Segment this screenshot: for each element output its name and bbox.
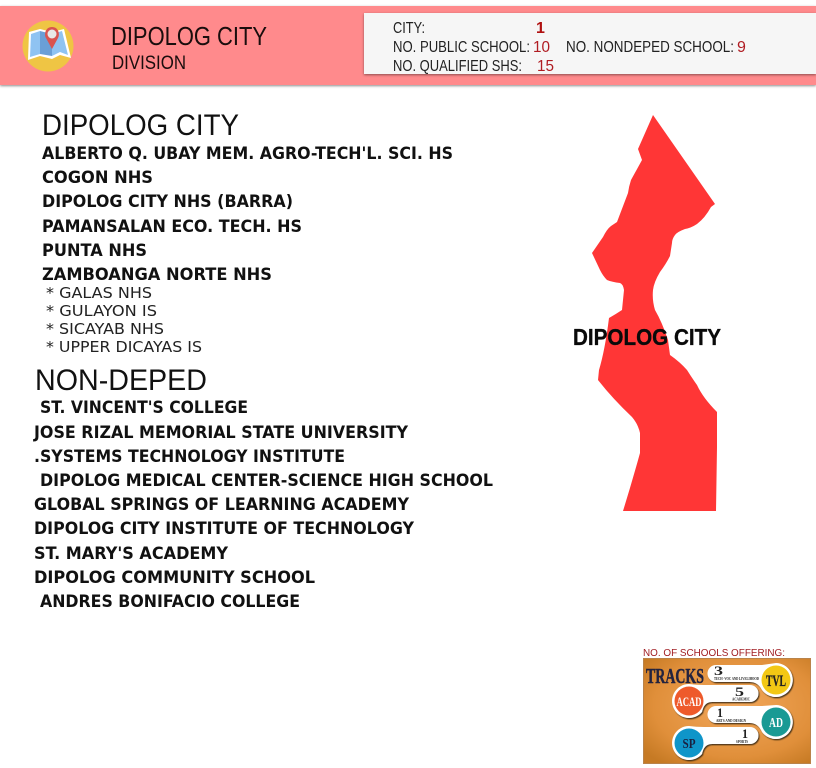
tracks caption: NO. OF SCHOOLS OFFERING: bbox=[643, 648, 785, 659]
tracks heading: TRACKS bbox=[646, 664, 704, 688]
track: SP: 1 bbox=[742, 726, 748, 741]
track: AD: ARTS AND DESIGN bbox=[716, 719, 746, 723]
track: AD: AD bbox=[769, 716, 783, 731]
stat: qualified shs: NO. QUALIFIED SHS: bbox=[393, 58, 522, 75]
non-deped school list: JOSE RIZAL MEMORIAL STATE UNIVERSITY bbox=[33, 423, 409, 442]
heading: Dipolog City: DIPOLOG CITY bbox=[42, 109, 239, 142]
track: SP: SP bbox=[682, 737, 696, 752]
track: TVL bbox=[708, 663, 793, 697]
stat: nondeped school: NO. NONDEPED SCHOOL: bbox=[566, 39, 734, 56]
non-deped school list: GLOBAL SPRINGS OF LEARNING ACADEMY bbox=[34, 495, 410, 514]
track: TVL: 3 bbox=[714, 663, 724, 678]
track: ACAD: ACADEMIC bbox=[732, 698, 750, 702]
track: TVL: TVL bbox=[766, 673, 786, 690]
school list: ALBERTO Q. UBAY MEM. AGRO-TECH'L. SCI. HS bbox=[42, 144, 453, 163]
track: TVL: TECH -VOC AND LIVELIHOOD bbox=[714, 677, 759, 681]
school list: PUNTA NHS bbox=[42, 241, 147, 260]
starred school list bbox=[46, 284, 202, 356]
school list: PAMANSALAN ECO. TECH. HS bbox=[42, 217, 302, 236]
starred school list: * GULAYON IS bbox=[46, 302, 157, 320]
non-deped school list: DIPOLOG MEDICAL CENTER-SCIENCE HIGH SCHOOL bbox=[40, 471, 493, 490]
track: SP: SPORTS bbox=[736, 740, 748, 744]
stat: city bbox=[393, 20, 545, 37]
non-deped school list: ST. MARY'S ACADEMY bbox=[34, 544, 229, 563]
subtitle: DIVISION bbox=[112, 53, 186, 74]
non-deped school list: DIPOLOG COMMUNITY SCHOOL bbox=[34, 568, 315, 587]
track: AD bbox=[708, 705, 793, 739]
track: ACAD: 5 bbox=[735, 684, 745, 699]
panel: public school list bbox=[42, 109, 453, 356]
track: ACAD bbox=[672, 684, 759, 718]
non-deped school list: ANDRES BONIFACIO COLLEGE bbox=[40, 592, 300, 611]
track: ACAD: ACAD bbox=[676, 694, 702, 709]
stat: nondeped school: 9 bbox=[737, 39, 746, 56]
starred school list: * SICAYAB NHS bbox=[46, 320, 164, 338]
track: SP bbox=[672, 726, 759, 760]
icon: map pin bbox=[22, 20, 74, 72]
starred school list: * GALAS NHS bbox=[46, 284, 152, 302]
header band bbox=[0, 6, 816, 85]
stat: city: 1 bbox=[536, 20, 545, 37]
track: AD: 1 bbox=[717, 705, 723, 720]
non-deped school list: ST. VINCENT'S COLLEGE bbox=[40, 398, 248, 417]
tracks background bbox=[644, 658, 810, 764]
school list: COGON NHS bbox=[42, 168, 153, 187]
stat: public school: 10 bbox=[533, 39, 550, 56]
panel: non-deped list bbox=[33, 364, 493, 611]
starred school list: * UPPER DICAYAS IS bbox=[46, 338, 202, 356]
map: Dipolog City bbox=[573, 115, 721, 511]
panel: summary stats bbox=[364, 13, 816, 75]
stat: qualified shs: 15 bbox=[537, 58, 554, 75]
heading: Non-DepEd: NON-DEPED bbox=[35, 364, 207, 397]
school list bbox=[42, 144, 453, 284]
panel: tracks bbox=[643, 648, 810, 764]
non-deped school list: DIPOLOG CITY INSTITUTE OF TECHNOLOGY bbox=[34, 519, 415, 538]
school list: DIPOLOG CITY NHS (BARRA) bbox=[42, 192, 293, 211]
non-deped school list: .SYSTEMS TECHNOLOGY INSTITUTE bbox=[34, 447, 345, 466]
title: DIPOLOG CITY bbox=[111, 21, 267, 51]
non-deped school list bbox=[33, 398, 493, 611]
stat: city: CITY: bbox=[393, 20, 425, 37]
map label: DIPOLOG CITY bbox=[573, 324, 721, 350]
school list: ZAMBOANGA NORTE NHS bbox=[42, 265, 272, 284]
stat: public school: NO. PUBLIC SCHOOL: bbox=[393, 39, 530, 56]
